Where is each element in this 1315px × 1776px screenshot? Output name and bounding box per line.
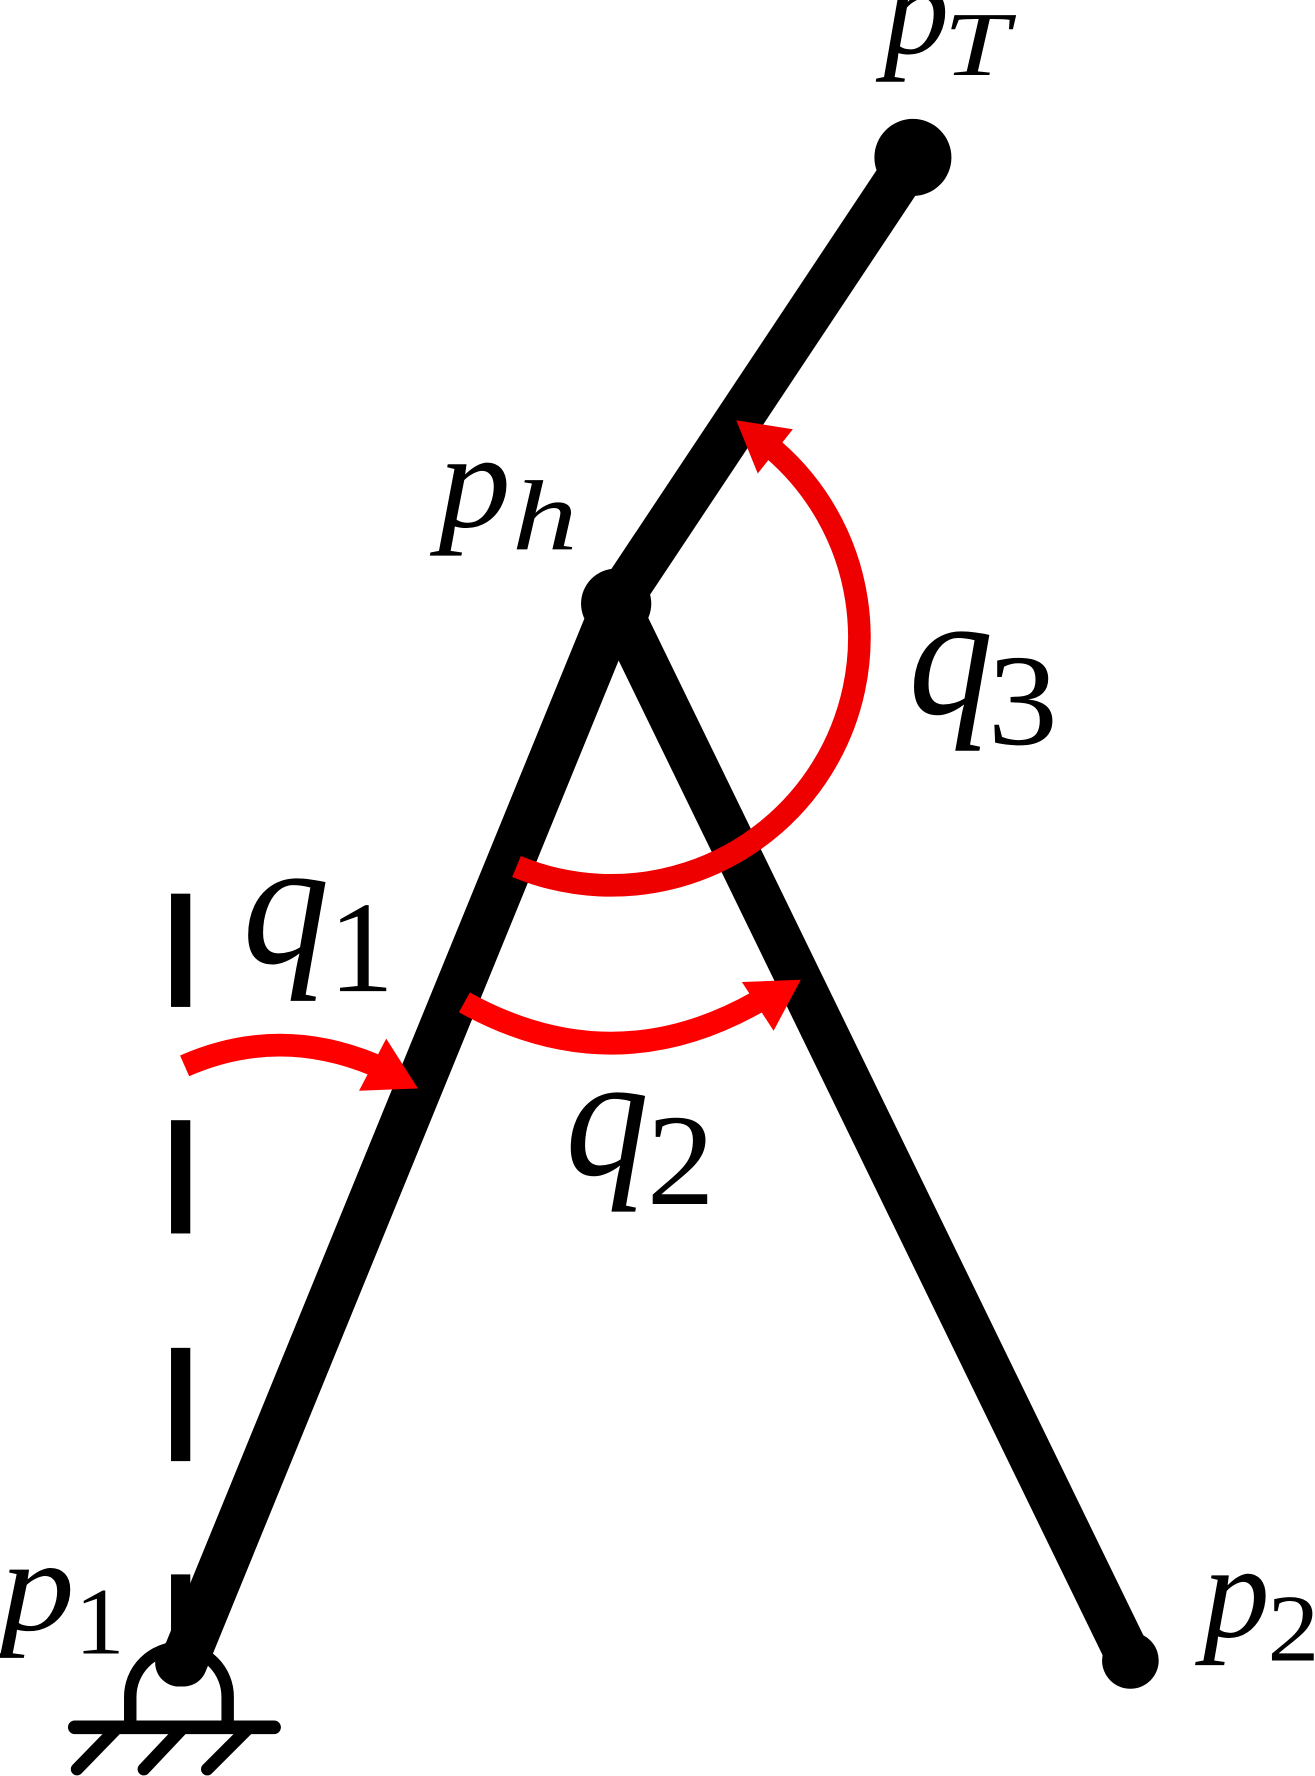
link: torso	[616, 157, 913, 604]
link: stance leg	[183, 604, 616, 1663]
label: p_1	[0, 1514, 125, 1675]
label: p_2: p	[1195, 1518, 1270, 1666]
label: q_3: q	[908, 559, 993, 752]
label: p_h: h	[512, 460, 578, 571]
label: q_3: 3	[988, 629, 1058, 773]
joint: stance foot	[155, 1639, 203, 1687]
label: p_2	[1195, 1518, 1315, 1681]
joint: torso tip	[874, 119, 951, 196]
label: q_2: 2	[647, 1089, 715, 1233]
arrow: angle q3	[516, 420, 859, 885]
label: q_2: q	[565, 1020, 649, 1213]
label: p_1: p	[0, 1514, 75, 1659]
icon: ground pivot support	[75, 1648, 274, 1769]
label: q_1: q	[242, 804, 330, 1002]
label: q_1	[242, 804, 394, 1020]
label: p_T	[876, 0, 1016, 95]
label: q_3	[908, 559, 1058, 773]
label: q_2	[565, 1020, 715, 1233]
joint: hip	[581, 569, 651, 639]
label: q_1: 1	[328, 876, 394, 1020]
dashed vertical reference line	[171, 894, 190, 1654]
arrow: angle q1	[185, 1039, 418, 1091]
label: p_2: 2	[1267, 1575, 1315, 1681]
label: p_1: 1	[75, 1569, 125, 1675]
label: p_h	[430, 407, 578, 571]
link: swing leg	[616, 604, 1130, 1660]
arrow: angle q2	[464, 980, 801, 1043]
joint: swing foot	[1102, 1632, 1159, 1689]
label: p_h: p	[430, 407, 511, 557]
